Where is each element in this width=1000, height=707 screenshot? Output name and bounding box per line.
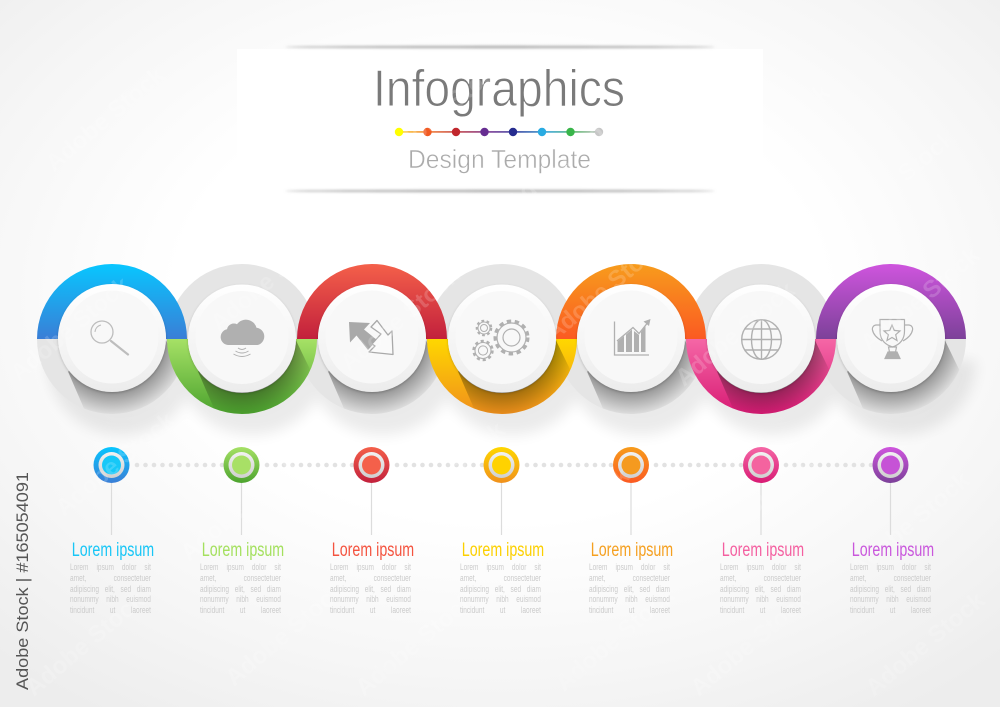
watermark pattern: Adobe Stock [830, 124, 961, 240]
text block 6: adipiscing elit, sed diam [720, 584, 801, 595]
pin 6: pink [743, 447, 779, 535]
text block 1: amet, consectetuer [70, 573, 151, 584]
text block 6: Lorem ipsum dolor sit [720, 562, 801, 573]
watermark pattern: Adobe Stock [40, 61, 171, 177]
text block 3: amet, consectetuer [330, 573, 411, 584]
dotted timeline [135, 463, 873, 467]
text block 2: Lorem ipsum dolor sit [200, 562, 281, 573]
pin 3: red [354, 447, 390, 535]
watermark pattern: Adobe Stock [855, 241, 986, 357]
watermark pattern: Adobe Stock [715, 426, 846, 542]
watermark pattern: Adobe Stock [845, 466, 976, 582]
upper arc: purple [816, 264, 966, 339]
text block 7: Lorem ipsum [852, 540, 934, 561]
text block 2: nonummy nibh euismod [200, 594, 281, 605]
text block 5: adipiscing elit, sed diam [589, 584, 670, 595]
text block 7: adipiscing elit, sed diam [850, 584, 931, 595]
watermark pattern: Adobe Stock [550, 581, 681, 697]
icon: trophy [872, 320, 913, 358]
lower arc: pink [686, 339, 851, 446]
text block 3: Lorem ipsum dolor sit [330, 562, 411, 573]
text block 1: nonummy nibh euismod [70, 594, 151, 605]
text block 1: Lorem ipsum [72, 540, 154, 561]
text block 1 [70, 540, 154, 616]
text block 4: Lorem ipsum dolor sit [460, 562, 541, 573]
watermark pattern: Adobe Stock [500, 101, 631, 217]
text block 5: Lorem ipsum dolor sit [589, 562, 670, 573]
text block 7: nonummy nibh euismod [850, 594, 931, 605]
watermark pattern: Adobe Stock [220, 576, 351, 692]
upper arc: orange [556, 264, 706, 339]
text block 3: tincidunt ut laoreet [330, 605, 411, 616]
lower arc: green [167, 339, 332, 446]
text block 5: nonummy nibh euismod [589, 594, 670, 605]
watermark pattern: Adobe Stock [350, 586, 481, 702]
title: Infographics: Infographics [373, 60, 625, 118]
pin 4: yellow [484, 447, 520, 535]
text block 7 [850, 540, 934, 616]
text block 4: nonummy nibh euismod [460, 594, 541, 605]
watermark pattern: Adobe Stock [540, 231, 671, 347]
ribbon of seven linked circles [37, 264, 981, 446]
icon: gears [474, 321, 527, 360]
text block 3: adipiscing elit, sed diam [330, 584, 411, 595]
text block 3: nonummy nibh euismod [330, 594, 411, 605]
title panel [237, 46, 763, 192]
stock id side text: Adobe Stock | #165054091 [13, 472, 32, 690]
text block 3 [330, 540, 414, 616]
pin 1: blue [94, 447, 130, 535]
watermark pattern: Adobe Stock [380, 51, 511, 167]
text block 5 [589, 540, 673, 616]
text block 1: tincidunt ut laoreet [70, 605, 151, 616]
icon: magnifier [91, 321, 128, 354]
watermark pattern: Adobe Stock [670, 276, 801, 392]
text block 4: Lorem ipsum [462, 540, 544, 561]
text block 2: Lorem ipsum [202, 540, 284, 561]
lower arc: yellow [427, 339, 592, 446]
text block 2: amet, consectetuer [200, 573, 281, 584]
upper arc: blue [37, 264, 187, 339]
text block 4: tincidunt ut laoreet [460, 605, 541, 616]
icon: globe [742, 320, 781, 359]
coloured dot divider [395, 128, 603, 136]
text block 7: Lorem ipsum dolor sit [850, 562, 931, 573]
watermark pattern: Adobe Stock [505, 461, 636, 577]
text block 6: tincidunt ut laoreet [720, 605, 801, 616]
text block 2 [200, 540, 284, 616]
text block 6: amet, consectetuer [720, 573, 801, 584]
text block 4 [460, 540, 544, 616]
pin 5: orange [613, 447, 649, 535]
text block 4: amet, consectetuer [460, 573, 541, 584]
subtitle: Design Template: Design Template [408, 144, 591, 174]
icon: diagonal arrows [349, 320, 393, 354]
text block 7: amet, consectetuer [850, 573, 931, 584]
watermark pattern: Adobe Stock [205, 221, 336, 337]
watermark pattern: Adobe Stock [685, 586, 816, 702]
text block 6 [720, 540, 804, 616]
watermark pattern: Adobe Stock [20, 586, 151, 702]
text block 3: Lorem ipsum [332, 540, 414, 561]
watermark pattern: Adobe Stock [50, 406, 181, 522]
text block 5: Lorem ipsum [591, 540, 673, 561]
watermark pattern: Adobe Stock [5, 271, 136, 387]
pin 2: green [224, 447, 260, 535]
watermark pattern: Adobe Stock [335, 261, 466, 377]
watermark pattern: Adobe Stock [168, 104, 299, 220]
text block 6: nonummy nibh euismod [720, 594, 801, 605]
icon: cloud with signal [221, 320, 264, 356]
icon: rising bar chart [614, 319, 650, 355]
watermark pattern: Adobe Stock [175, 451, 306, 567]
text block 5: amet, consectetuer [589, 573, 670, 584]
watermark pattern: Adobe Stock [860, 586, 991, 702]
text block 2: adipiscing elit, sed diam [200, 584, 281, 595]
text block 1: adipiscing elit, sed diam [70, 584, 151, 595]
upper arc: red [297, 264, 447, 339]
text block 6: Lorem ipsum [722, 540, 804, 561]
text block 4: adipiscing elit, sed diam [460, 584, 541, 595]
watermark pattern: Adobe Stock [705, 78, 836, 194]
text block 7: tincidunt ut laoreet [850, 605, 931, 616]
pin 7: purple [872, 447, 908, 535]
watermark pattern: Adobe Stock [380, 416, 511, 532]
text block 1: Lorem ipsum dolor sit [70, 562, 151, 573]
text block 2: tincidunt ut laoreet [200, 605, 281, 616]
text block 5: tincidunt ut laoreet [589, 605, 670, 616]
